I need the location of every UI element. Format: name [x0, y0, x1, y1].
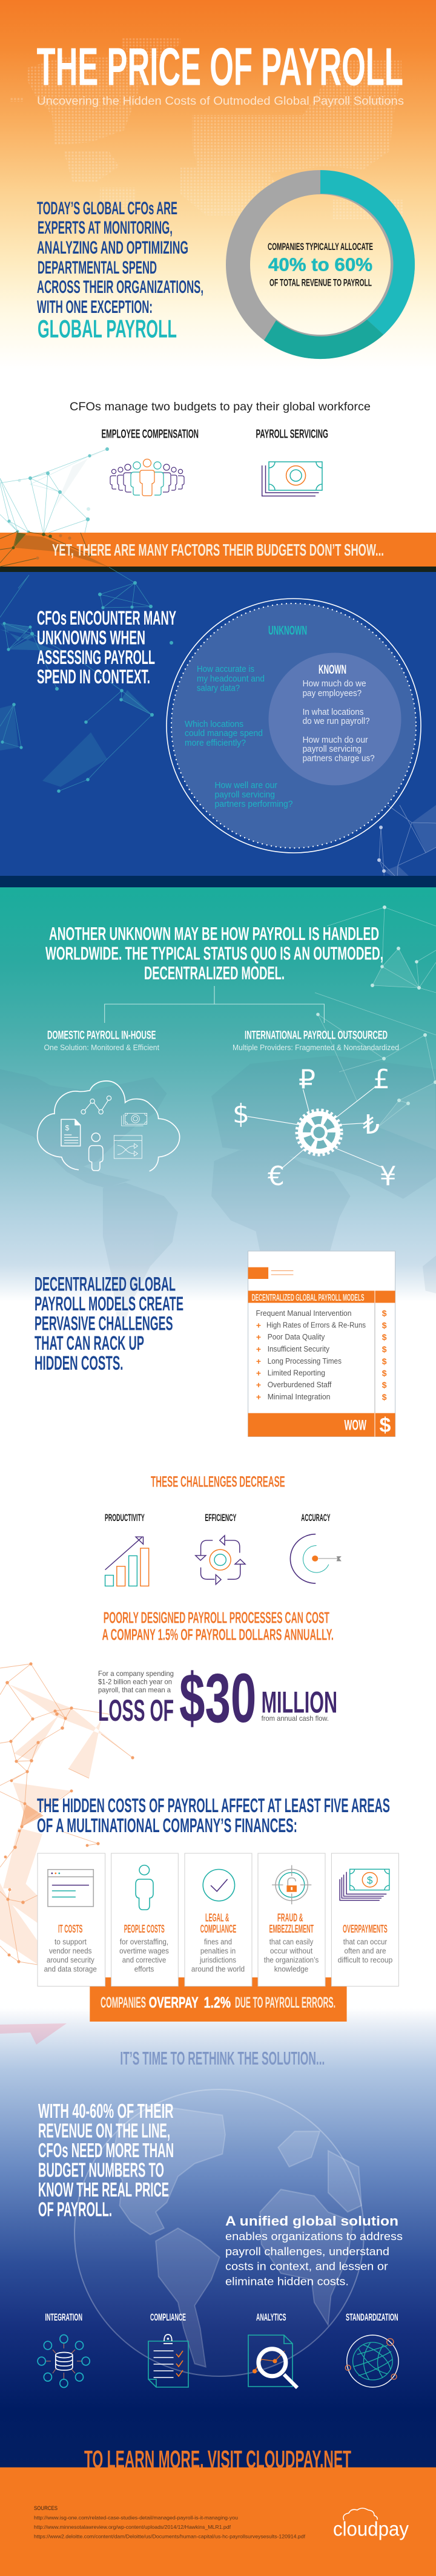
teal gradient background: [0, 887, 436, 1301]
unknowns heading: UNKNOWNS WHEN: [37, 627, 145, 649]
cost table card: $: [382, 1332, 387, 1342]
budgets heading: CFOs manage two budgets to pay their global workforce: [70, 400, 371, 413]
cost table card: +: [256, 1356, 261, 1366]
cost table card: $: [382, 1356, 387, 1366]
cost table card: Poor Data Quality: [268, 1333, 325, 1341]
overpay text: [101, 1994, 335, 2011]
blue fade background: [0, 2008, 436, 2468]
big number: $30: $30: [179, 1660, 256, 1737]
unified solution text: enables organizations to address: [225, 2230, 403, 2242]
intro text block: DEPARTMENTAL SPEND: [38, 258, 157, 278]
sources: http://www.minnesotalawreview.org/wp-content/uploads/2014/12/Hawkins_MLR1.pdf: [34, 2524, 231, 2530]
subtitle: Uncovering the Hidden Costs of Outmoded Global Payroll Solutions: [37, 95, 404, 108]
overpay text: COMPANIES: [101, 1994, 146, 2011]
loss intro text: [98, 1669, 174, 1694]
cost table card: +: [256, 1344, 261, 1354]
donut chart: 40% to 60%: [238, 170, 415, 359]
card: fraud and embezzlement: occur without: [270, 1947, 313, 1956]
unknowns heading: [37, 607, 176, 688]
overpay text: OVERPAY: [149, 1994, 199, 2011]
donut chart: 40% to 60%: OF TOTAL REVENUE TO PAYROLL: [269, 277, 372, 288]
statement: 1.5% of payroll dollars: [102, 1609, 334, 1644]
labels: productivity, efficiency, accuracy: [105, 1513, 331, 1523]
unknown questions: partners performing?: [214, 799, 293, 809]
cost table card: Insufficient Security: [268, 1345, 330, 1353]
intro text block: ANALYZING AND OPTIMIZING: [37, 238, 188, 258]
loss of: LOSS OF: [98, 1694, 174, 1727]
sources: https://www2.deloitte.com/content/dam/Deloitte/us/Documents/human-capital/us-hc-payrollsurveysesults-120914.pdf: [34, 2534, 306, 2540]
model heading: DECENTRALIZED MODEL.: [144, 962, 285, 984]
unified solution text: A unified global solution: [225, 2213, 398, 2229]
loss intro text: payroll, that can mean a: [98, 1686, 171, 1694]
unknowns heading: ASSESSING PAYROLL: [37, 646, 155, 668]
cost table card: +: [256, 1392, 261, 1402]
rethink statement: REVENUE ON THE LINE,: [38, 2120, 170, 2141]
cost table card: +: [256, 1332, 261, 1342]
cost table card: $: [382, 1380, 387, 1390]
cost table card: $: [382, 1309, 387, 1318]
icon: analytics magnifier: [248, 2335, 297, 2388]
unified solution text: [225, 2213, 403, 2288]
overpay text: 1.2%: [204, 1994, 231, 2011]
five areas heading: [37, 1795, 390, 1836]
panel: decentralized model: [0, 887, 436, 1329]
rethink statement: BUDGET NUMBERS TO: [38, 2158, 164, 2181]
pale network over fade: [0, 2023, 67, 2045]
labels: productivity, efficiency, accuracy: ACCURACY: [301, 1513, 331, 1523]
card: people costs: overtime wages: [119, 1947, 169, 1956]
unknown circle: [171, 603, 416, 848]
network decoration orange: [0, 1662, 134, 1965]
dark divider: [0, 567, 436, 572]
card: legal and compliance: LEGAL &: [205, 1911, 229, 1924]
cost table card: High Rates of Errors & Re-Runs: [266, 1321, 366, 1330]
loss intro text: $1-2 billion each year on: [98, 1678, 172, 1686]
unknown questions: How well are our: [214, 780, 277, 790]
network overlay on banner: [0, 531, 109, 567]
card: people costs: for overstaffing,: [120, 1937, 168, 1946]
card: fraud and embezzlement: [258, 1853, 325, 1986]
challenges heading: THAT CAN RACK UP: [35, 1332, 144, 1354]
cost table card: WOW: [344, 1417, 366, 1433]
orange overpay banner: [90, 1977, 347, 2022]
panel: hero: [0, 0, 436, 387]
banner bar: [0, 533, 436, 567]
cost table card: Long Processing Times: [268, 1357, 342, 1365]
panel: two budgets: [0, 400, 371, 552]
card: it costs: around security: [47, 1956, 94, 1964]
rethink statement: [38, 2100, 174, 2220]
challenges heading: HIDDEN COSTS.: [35, 1352, 124, 1374]
panel: overpay banner and cards: [38, 1853, 398, 2022]
cost table card: Frequent Manual Intervention: [256, 1309, 352, 1318]
label: employee compensation: EMPLOYEE COMPENSATION: [102, 427, 199, 441]
icon: cloud with payroll items: $: [65, 1123, 70, 1132]
from annual cash flow: from annual cash flow.: [262, 1714, 329, 1723]
card: fraud and embezzlement: knowledge: [274, 1965, 308, 1973]
card: it costs: and data storage: [44, 1965, 97, 1973]
blue background: [0, 572, 436, 876]
known questions: partners charge us?: [303, 753, 375, 764]
column: international payroll: Multiple Providers: Fragmented & Nonstandardized: [233, 1043, 399, 1052]
labels: productivity, efficiency, accuracy: PRODUCTIVITY: [105, 1513, 145, 1523]
card: fraud and embezzlement: that can easily: [269, 1937, 314, 1946]
cost table card: +: [256, 1368, 261, 1378]
rethink statement: KNOW THE REAL PRICE: [38, 2178, 169, 2201]
icon: cloud with payroll items: [38, 1081, 180, 1171]
network decoration in blue: [0, 567, 173, 793]
card: it costs: IT COSTS: [58, 1923, 82, 1935]
solution labels: ANALYTICS: [256, 2312, 286, 2323]
globe: [74, 2089, 364, 2376]
intro text block: WITH ONE EXCEPTION:: [37, 297, 153, 317]
known questions: pay employees?: [303, 688, 362, 698]
label: known: KNOWN: [319, 662, 346, 677]
card: legal and compliance: around the world: [191, 1965, 245, 1973]
cost table card: $: [380, 1414, 391, 1437]
known questions: payroll servicing: [303, 744, 362, 754]
card: it costs: to support: [54, 1937, 87, 1946]
rethink statement: CFOs NEED MORE THAN: [38, 2139, 174, 2161]
card: overpayments: $: [367, 1874, 373, 1886]
icon: gear with currencies: ₽: [299, 1064, 315, 1095]
card: fraud and embezzlement: FRAUD &: [277, 1911, 303, 1924]
known questions: In what locations: [303, 707, 364, 717]
sources: [34, 2505, 306, 2540]
panel: hidden challenges: [35, 1251, 395, 1644]
card: it costs: vendor needs: [49, 1947, 91, 1956]
cost table card: $: [382, 1392, 387, 1402]
icon: gear with currencies: $: [233, 1099, 249, 1129]
connector bracket: [105, 986, 324, 1023]
column: domestic payroll: [44, 1028, 160, 1052]
icon: standardization globe: [345, 2335, 398, 2387]
solution labels: COMPLIANCE: [150, 2312, 186, 2323]
icon: accuracy target: [290, 1534, 342, 1583]
intro text block: EXPERTS AT MONITORING,: [38, 218, 173, 238]
dark divider: [0, 876, 436, 887]
intro text block: [37, 199, 203, 317]
card: overpayments: that can occur: [343, 1937, 387, 1946]
sources: SOURCES: [34, 2505, 58, 2511]
challenges heading: PERVASIVE CHALLENGES: [35, 1312, 173, 1334]
panel: unknowns: [0, 567, 436, 907]
hero gradient background: [0, 0, 436, 387]
known questions: How much do we: [303, 678, 366, 689]
donut chart: 40% to 60%: 40% to 60%: [268, 254, 372, 275]
intro text block: ACROSS THEIR ORGANIZATIONS,: [37, 277, 203, 297]
card: overpayments: [331, 1853, 398, 1986]
label: payroll servicing: PAYROLL SERVICING: [256, 427, 328, 441]
unified solution text: payroll challenges, understand: [225, 2246, 389, 2258]
cost table card: Overburdened Staff: [268, 1381, 332, 1389]
card: people costs: [111, 1853, 178, 1986]
icon: compliance clipboard: [148, 2334, 188, 2387]
network decoration teal: [315, 905, 436, 1150]
cost table card: Limited Reporting: [268, 1369, 325, 1378]
network nodes: [7, 447, 109, 534]
icon: productivity chart: [105, 1537, 149, 1586]
panel: five areas: [37, 1795, 390, 1836]
card: overpayments: OVERPAYMENTS: [343, 1923, 388, 1935]
card: it costs: [38, 1853, 105, 1986]
panel: footer: [0, 2467, 436, 2576]
challenges heading: PAYROLL MODELS CREATE: [35, 1293, 183, 1315]
model heading: [45, 923, 383, 984]
panel: $30 million loss: [98, 1660, 337, 1737]
unknown questions: my headcount and: [197, 674, 265, 684]
faint world map: [0, 1056, 436, 1329]
panel: orange banner: [0, 531, 436, 572]
card: overpayments: difficult to recoup: [338, 1956, 392, 1964]
icon: people group: [110, 459, 184, 496]
challenges heading: [35, 1273, 183, 1374]
cost table card: Minimal Integration: [268, 1393, 331, 1401]
unknowns heading: SPEND IN CONTEXT.: [37, 666, 150, 688]
cloudpay logo: [333, 2508, 409, 2540]
known circle: [269, 652, 401, 786]
cost table card: +: [256, 1321, 261, 1330]
million: MILLION: [262, 1685, 337, 1719]
orange footer background: [0, 2467, 436, 2576]
rethink statement: WITH 40-60% OF THEIR: [38, 2100, 174, 2122]
card: legal and compliance: COMPLIANCE: [200, 1923, 236, 1935]
unified solution text: eliminate hidden costs.: [225, 2276, 349, 2288]
unknown questions: salary data?: [197, 683, 240, 694]
card: legal and compliance: fines and: [204, 1937, 232, 1946]
global payroll highlight: GLOBAL PAYROLL: [38, 315, 177, 343]
card: overpayments: often and are: [344, 1947, 386, 1956]
column: international payroll: [233, 1028, 399, 1052]
icon: gear with currencies: ¥: [380, 1161, 397, 1192]
unknowns heading: CFOs ENCOUNTER MANY: [37, 607, 176, 629]
icon: gear with currencies: [233, 1064, 397, 1192]
column: domestic payroll: One Solution: Monitored & Efficient: [44, 1043, 160, 1052]
unknown questions: [185, 664, 293, 809]
card: fraud and embezzlement: the organization’s: [264, 1956, 319, 1964]
overpay text: DUE TO PAYROLL ERRORS.: [235, 1994, 335, 2011]
known questions: do we run payroll?: [303, 716, 370, 726]
cloudpay logo: cloudpay: [333, 2518, 409, 2540]
loss intro text: For a company spending: [98, 1669, 174, 1678]
cost table card: $: [382, 1321, 387, 1330]
card: legal and compliance: [185, 1853, 252, 1986]
known questions: [303, 678, 375, 764]
card: fraud and embezzlement: EMBEZZLEMENT: [269, 1923, 314, 1935]
card: legal and compliance: penalties in: [200, 1947, 236, 1956]
icon: integration: [38, 2335, 90, 2387]
unknown questions: How accurate is: [197, 664, 254, 674]
unified solution text: costs in context, and lessen or: [225, 2260, 388, 2272]
unknown questions: could manage spend: [185, 728, 263, 738]
cost table card: $: [382, 1368, 387, 1378]
icon: gear with currencies: €: [268, 1161, 285, 1192]
card: people costs: efforts: [134, 1965, 154, 1973]
card: people costs: PEOPLE COSTS: [124, 1923, 165, 1935]
label: unknown: UNKNOWN: [268, 623, 307, 638]
network decoration right: [377, 805, 436, 907]
panel: rethink the solution: [38, 2048, 403, 2388]
cost table card: [248, 1251, 395, 1437]
unknown questions: more efficiently?: [185, 738, 246, 748]
icon: banknotes: [262, 462, 322, 496]
intro text block: TODAY’S GLOBAL CFOs ARE: [37, 199, 177, 218]
network decoration top left: [0, 449, 107, 552]
heading: these challenges decrease: THESE CHALLENGES DECREASE: [151, 1473, 285, 1490]
column: domestic payroll: DOMESTIC PAYROLL IN-HOUSE: [47, 1028, 156, 1042]
unknown questions: payroll servicing: [214, 789, 275, 800]
icon: efficiency cycle: [196, 1536, 245, 1585]
rethink statement: OF PAYROLL.: [38, 2198, 112, 2220]
challenges heading: DECENTRALIZED GLOBAL: [35, 1273, 176, 1295]
cost table card: $: [382, 1344, 387, 1354]
unknown questions: Which locations: [185, 719, 243, 729]
icon: gear with currencies: £: [373, 1064, 390, 1095]
outer ring: [167, 599, 421, 853]
dotted world map: [10, 38, 403, 219]
labels: productivity, efficiency, accuracy: EFFICIENCY: [205, 1513, 236, 1523]
card: legal and compliance: jurisdictions: [199, 1956, 236, 1964]
cost table card: +: [256, 1380, 261, 1390]
solution labels: INTEGRATION: [45, 2312, 82, 2323]
sources: http://www.isg-one.com/related-case-studies-detail/managed-payroll-is-it-managing-you: [34, 2515, 238, 2521]
icon: gear with currencies: ₺: [363, 1109, 380, 1140]
card: people costs: and corrective: [122, 1956, 166, 1964]
known questions: How much do our: [303, 735, 368, 745]
solution labels: [45, 2312, 398, 2323]
